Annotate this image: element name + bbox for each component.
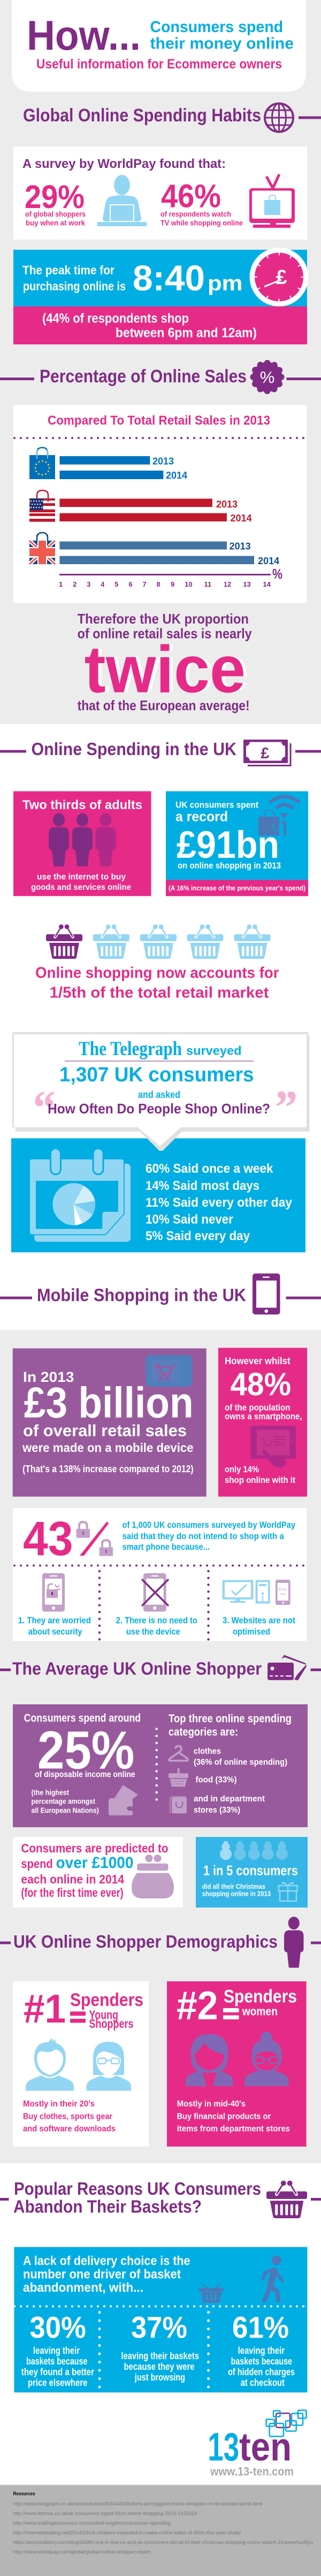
chart axis: 2 — [73, 580, 77, 588]
white background band: UK spending — [0, 724, 321, 1330]
survey result list: 14% Said most days — [146, 1179, 259, 1193]
section heading: Mobile Shopping in the UK — [0, 1273, 321, 1314]
section heading: Online Spending in the UK — [0, 739, 321, 766]
survey result list — [146, 1162, 293, 1243]
heading: number two — [177, 1983, 297, 2028]
chart axis — [59, 566, 282, 588]
icon: globe — [265, 104, 293, 132]
panel: 3 billion mobile sales: £3 billion — [24, 1379, 194, 1427]
Telegraph logo text: The Telegraph — [79, 1038, 182, 1060]
heading: number one: #1 — [24, 1986, 66, 2031]
resources links: http://internetretailing.net/2014/03/uk-retailers-expected-to-make-online-sales-of-45bn-this-year-study/ — [13, 2530, 241, 2535]
logo wordmark: 13 — [208, 2425, 239, 2469]
resources links: http://www.tradingeconomics.com/united-kingdom/consumer-spending — [13, 2520, 171, 2526]
icon: young man — [26, 2038, 74, 2091]
panel: over 1000 predicted spend: (for the first time ever) — [21, 1886, 124, 1900]
panel: 3 billion mobile sales: of overall retail sales — [23, 1421, 187, 1440]
chart axis: 14 — [263, 580, 271, 588]
peak time value: 8:40 — [133, 258, 205, 298]
icon: gift — [279, 1882, 297, 1901]
disposable income stat: all European Nations) — [31, 1806, 99, 1814]
reason 1: security: about security — [28, 1626, 82, 1636]
chart axis: 10 — [185, 580, 193, 588]
panel: smartphone ownership — [218, 1348, 307, 1497]
icon row: five baskets, one highlighted — [46, 925, 271, 959]
stat: 37 percent: just browsing — [134, 2372, 185, 2383]
stat: 43 percent with padlocks — [23, 1512, 113, 1566]
chart axis: 3 — [87, 580, 90, 588]
chart axis: % — [272, 566, 282, 582]
chart axis: 12 — [224, 580, 231, 588]
panel: number two spenders, women — [167, 1981, 306, 2147]
icon: padlock upper — [77, 1522, 90, 1538]
grey background band: top — [0, 0, 321, 724]
top spending categories: categories are: — [169, 1726, 238, 1739]
panel: number one spenders, young shoppers: Buy clothes, sports gear — [23, 2112, 112, 2121]
stat: 61 percent: at checkout — [241, 2378, 285, 2388]
icon: smartphone — [253, 1273, 280, 1314]
survey heading: A survey by WorldPay found that: — [22, 157, 226, 171]
stat: 30 percent — [21, 2311, 94, 2388]
grey background band: mobile and shopper — [0, 1330, 321, 2163]
panel: smartphone ownership: shop online with it — [225, 1475, 295, 1485]
icon: clothes hanger — [169, 1746, 188, 1760]
section heading: The Average UK Online Shopper — [0, 1655, 321, 1680]
bars: USA: 2013 — [216, 499, 238, 510]
panel: 91 billion record spend: £91bn — [177, 824, 279, 866]
chart axis: 6 — [128, 580, 133, 588]
chart axis: 9 — [171, 580, 174, 588]
section heading: reasons for abandoning baskets: Popular Reasons UK Consumers — [14, 2179, 261, 2198]
stat: 29 percent: 29% — [25, 179, 85, 215]
section heading: UK Online Shopper Demographics: UK Online Shopper Demographics — [13, 1932, 278, 1951]
bars: EU: 2014 — [166, 470, 187, 481]
stat: 29 percent: of global shoppers — [25, 210, 86, 218]
panel: number one spenders, young shoppers: and software downloads — [23, 2125, 116, 2134]
panel: peak purchasing time: pm — [208, 272, 243, 295]
panel: number two spenders, women: Buy financial products or — [177, 2112, 271, 2121]
category: clothes: clothes — [194, 1747, 221, 1756]
disposable income stat: Consumers spend around — [24, 1712, 141, 1725]
panel: christmas shopping — [196, 1837, 308, 1908]
panel: reasons not to shop on a smartphone — [13, 1508, 307, 1641]
panel: smartphone ownership: of the population — [225, 1402, 291, 1413]
panel: over 1000 predicted spend: spend — [21, 1857, 53, 1871]
icon: person at laptop — [97, 175, 147, 226]
top spending categories — [169, 1713, 292, 1814]
section heading: Online Spending in the UK: Online Spending in the UK — [31, 739, 236, 759]
icon: US flag bag — [29, 490, 55, 522]
section heading: reasons for abandoning baskets: Abandon Their Baskets? — [13, 2197, 202, 2216]
stat: 46 percent: TV while shopping online — [160, 218, 243, 227]
panel: basket abandonment reasons: number one driver of basket — [23, 2267, 181, 2282]
increase note: (A 16% increase of the previous year's spend) — [169, 884, 305, 892]
stat: 29 percent: buy when at work — [26, 218, 85, 227]
title: How: How... — [27, 12, 141, 59]
panel: over 1000 predicted spend: Consumers are predicted to — [21, 1841, 169, 1855]
icon: person — [284, 1917, 303, 1968]
stat: 30 percent: price elsewhere — [28, 2378, 87, 2388]
category: department stores: and in department — [194, 1795, 265, 1804]
logo mark: interlocking squares — [266, 2410, 306, 2436]
panel: 3 billion mobile sales — [13, 1348, 207, 1497]
reason 2: no need — [116, 1573, 197, 1636]
statement: UK proportion nearly twice European average — [78, 611, 252, 713]
reason 3: not optimised: optimised — [233, 1626, 270, 1636]
stat: 46 percent: 46% — [161, 178, 221, 214]
disposable income stat: of disposable income online — [35, 1770, 135, 1779]
chart axis: 7 — [142, 580, 147, 588]
panel: number two spenders, women: items from department stores — [177, 2125, 290, 2134]
icon: woman with bob hair — [186, 2034, 233, 2086]
icon: abandoned basket — [199, 2284, 224, 2303]
icon: three people — [49, 813, 116, 866]
stat: 30 percent: baskets because — [26, 2356, 87, 2367]
statement: UK proportion nearly twice European average: Therefore the UK proportion — [78, 611, 249, 627]
title: their money online: their money online — [150, 35, 294, 52]
statement: one fifth of retail market — [35, 965, 279, 1001]
disposable income stat: 25% — [37, 1720, 134, 1780]
panel: bar chart of online share of retail sales — [13, 405, 307, 603]
key word: twice: twice — [85, 633, 246, 707]
opening quote: “ — [30, 1081, 55, 1134]
stat: 37 percent: because they were — [124, 2362, 195, 2372]
consumer count: 1,307 UK consumers — [59, 1064, 254, 1086]
icon: food basket — [169, 1768, 188, 1787]
panel: basket abandonment reasons: abandonment, with... — [23, 2281, 143, 2295]
icon: person walking away — [263, 2256, 282, 2301]
respondents note: (44% of respondents shop — [42, 311, 189, 326]
heading: number one — [24, 1986, 143, 2031]
panel: 3 billion mobile sales: were made on a mobile device — [22, 1441, 194, 1455]
section heading: The Average UK Online Shopper: The Average UK Online Shopper — [12, 1658, 262, 1678]
disposable income stat: percentage amongst — [31, 1797, 95, 1805]
chart heading: Compared To Total Retail Sales in 2013 — [48, 413, 270, 428]
disposable income stat: (the highest — [31, 1788, 69, 1796]
stat: 61 percent: baskets because — [231, 2356, 292, 2367]
disposable income stat — [24, 1712, 141, 1814]
abandonment intro: A lack of delivery choice is the — [23, 2254, 190, 2269]
stat: 30 percent: they found a better — [21, 2367, 94, 2378]
mobile sales text: In 2013 — [23, 1369, 74, 1385]
panel: two thirds of adults — [13, 791, 151, 896]
logo: 13ten: ten — [239, 2425, 292, 2469]
speech bubble: Telegraph survey — [12, 1032, 310, 1151]
panel: peak purchasing time: purchasing online is — [23, 279, 126, 293]
panel: how often people shop results — [11, 1139, 305, 1252]
logo: 13ten — [208, 2410, 306, 2478]
bars: EU: 2013 — [152, 456, 174, 467]
panel: over 1000 predicted spend: over £1000 — [56, 1854, 134, 1872]
survey explanation: said that they do not intend to shop with a — [122, 1531, 284, 1541]
panel: number one spenders, young shoppers — [13, 1981, 149, 2147]
section heading: Global Online Spending Habits — [23, 104, 321, 132]
chart axis: 13 — [243, 580, 251, 588]
chart axis: 11 — [204, 580, 211, 588]
survey question: How Often Do People Shop Online? — [48, 1101, 270, 1117]
survey result list: 10% Said never — [146, 1212, 233, 1227]
panel: peak purchasing time — [13, 248, 308, 344]
panel: smartphone ownership: owns a smartphone, — [225, 1411, 302, 1421]
christmas text: 1 in 5 consumers — [203, 1862, 298, 1878]
subtitle: Useful information for Ecommerce owners — [36, 57, 282, 72]
icon: clock with pound sign: £ — [276, 266, 287, 289]
pie chart — [52, 1183, 95, 1225]
statement: UK proportion nearly twice European average: of online retail sales is nearly — [78, 626, 252, 642]
reason 3: not optimised: 404 — [280, 1593, 285, 1596]
icon: clock with pound sign — [249, 248, 308, 306]
panel: 91 billion record spend: a record — [175, 809, 228, 825]
chart axis: 1 — [59, 580, 63, 588]
stat: 61 percent: leaving their — [238, 2346, 285, 2356]
survey explanation: smart phone because... — [122, 1542, 210, 1552]
icon: percent badge — [253, 362, 282, 392]
section heading: Percentage of Online Sales: Percentage of Online Sales — [40, 366, 247, 387]
stat: 30 percent: 30% — [30, 2311, 86, 2345]
icon: percent badge: % — [260, 368, 274, 387]
icon: hand on tablet — [250, 1426, 296, 1468]
icon: wifi and shopping bags — [258, 797, 300, 835]
panel: two thirds of adults: Two thirds of adults — [22, 798, 142, 812]
resources heading: Resources — [13, 2491, 35, 2496]
section heading: Percentage of Online Sales — [0, 362, 321, 392]
heading: number two: Spenders — [224, 1987, 297, 2007]
icon: credit cards — [268, 1655, 307, 1680]
closing line: that of the European average! — [78, 697, 250, 713]
survey result list: 60% Said once a week — [146, 1162, 273, 1176]
category: food: food (33%) — [196, 1775, 237, 1785]
stat: 37 percent: leaving their baskets — [121, 2351, 199, 2362]
stat: 37 percent: 37% — [131, 2311, 187, 2345]
heading: number two: women — [242, 2005, 278, 2018]
heading: number one: Shoppers — [89, 2017, 134, 2031]
statement: one fifth of retail market: 1/5th of the total retail market — [50, 984, 269, 1001]
stat: 61 percent: of hidden charges — [228, 2367, 295, 2378]
record spend text: UK consumers spent — [175, 800, 258, 810]
panel: 91 billion record spend: on online shopping in 2013 — [178, 860, 281, 871]
section heading: Mobile Shopping in the UK: Mobile Shopping in the UK — [37, 1285, 246, 1305]
heading: number two: #2 — [177, 1983, 218, 2028]
reason 1: security — [18, 1573, 91, 1636]
icon row: five snowmen — [220, 1841, 288, 1860]
panel: WorldPay survey — [13, 147, 307, 240]
panel: 3 billion mobile sales: (That's a 138% increase compared to 2012) — [22, 1464, 194, 1474]
young shoppers text: Mostly in their 20's — [23, 2100, 95, 2109]
resources links: http://www.worldpay.com/global/global-online-shopper-report — [13, 2549, 151, 2555]
resources links: http://www.telegraph.co.uk/news/uknews/9054400/Britons-are-biggest-online-shoppers-in-developed-world.html — [13, 2501, 262, 2506]
survey result list: 11% Said every other day — [146, 1195, 293, 1210]
icon: television with shopping bag — [249, 174, 295, 228]
panel: basket abandonment reasons — [14, 2247, 307, 2393]
survey explanation: of 1,000 UK consumers surveyed by WorldPay — [122, 1520, 295, 1530]
word shadow: twice — [88, 633, 249, 707]
statement: one fifth of retail market: Online shopping now accounts for — [35, 965, 279, 982]
stat: 46 percent: of respondents watch — [160, 210, 231, 218]
icon: older woman with glasses — [244, 2032, 289, 2086]
peak time label: The peak time for — [22, 263, 114, 277]
stat: 37 percent — [121, 2311, 199, 2383]
top spending categories: stores (33%) — [194, 1805, 240, 1814]
icon: banknotes — [243, 740, 291, 766]
only 14 percent text: only 14% — [225, 1464, 259, 1474]
reason 3: not optimised: 3. Websites are not — [223, 1616, 295, 1626]
bars: USA — [59, 498, 252, 524]
panel: two thirds of adults: goods and services online — [31, 883, 131, 892]
ownership text: However whilst — [225, 1356, 291, 1366]
heading: number one: Spenders — [70, 1990, 143, 2010]
title panel — [12, 0, 306, 92]
bars: UK — [59, 541, 279, 566]
and asked: and asked — [138, 1089, 180, 1100]
icon: young woman with glasses — [87, 2042, 131, 2091]
icon: basket — [266, 2181, 307, 2218]
icon: UK flag bag — [29, 533, 55, 564]
top spending categories: Top three online spending — [169, 1713, 292, 1725]
section heading: reasons for abandoning baskets — [0, 2179, 321, 2218]
top spending categories: (36% of online spending) — [194, 1758, 287, 1767]
white background band: abandon baskets — [0, 2163, 321, 2485]
icon: tablet with cart — [146, 1355, 192, 1387]
stat: 43 percent with padlocks: 43 — [23, 1512, 73, 1566]
chart axis: 4 — [101, 580, 105, 588]
panel: peak purchasing time: between 6pm and 12am) — [116, 326, 257, 341]
survey result list: 5% Said every day — [146, 1229, 250, 1243]
reason 3: not optimised: Error — [279, 1588, 287, 1591]
panel: smartphone ownership: 48% — [230, 1366, 291, 1402]
women text: Mostly in mid-40's — [177, 2100, 246, 2109]
panel: 91 billion record spend — [166, 791, 308, 896]
panel: christmas shopping: shopping online in 2013 — [202, 1889, 271, 1897]
heading: number one: Young — [89, 2008, 118, 2022]
chart axis: 8 — [156, 580, 160, 588]
panel: christmas shopping: did all their Christmas — [202, 1882, 265, 1890]
stat: 30 percent: leaving their — [33, 2346, 80, 2356]
icon: EU flag bag — [29, 448, 55, 479]
reason 1: security: 1. They are worried — [18, 1616, 91, 1626]
reason 2: no need: use the device — [126, 1626, 180, 1636]
icon: coin purse — [132, 1855, 174, 1898]
section heading: UK Online Shopper Demographics — [0, 1917, 321, 1968]
section heading: Global Online Spending Habits: Global Online Spending Habits — [23, 105, 261, 126]
reason 3: not optimised — [223, 1580, 295, 1636]
resources footer — [0, 2485, 321, 2576]
icon: department store bag — [170, 1797, 187, 1813]
closing quote: ” — [272, 1081, 296, 1134]
stat: 61 percent: 61% — [232, 2311, 289, 2345]
panel: over 1000 predicted spend — [13, 1837, 183, 1908]
stat: 61 percent — [228, 2311, 295, 2388]
resources links — [13, 2501, 314, 2555]
reason 2: no need: 2. There is no need to — [116, 1616, 197, 1626]
stat: 46 percent — [160, 178, 243, 227]
bars: UK: 2014 — [258, 556, 279, 566]
icon: banknotes: £ — [261, 745, 270, 762]
icon: calendar with pie chart — [30, 1149, 131, 1242]
survey explanation — [122, 1520, 295, 1552]
panel: over 1000 predicted spend: each online in 2014 — [21, 1872, 124, 1886]
resources links: http://www.ibtimes.co.uk/uk-consumers-spent-91bn-online-shopping-2013-1432424 — [13, 2511, 197, 2516]
resources links: https://econsultancy.com/blog/64280-one-in-five-us-and-uk-consumers-did-all-of-their-christmas-shopping-online-stats#i.1ihaswvhuxf5yu — [13, 2540, 314, 2545]
website: www.13-ten.com — [210, 2465, 294, 2478]
surveyed: surveyed — [186, 1044, 242, 1058]
bars: UK: 2013 — [230, 541, 251, 552]
chart axis: 5 — [114, 580, 118, 588]
caption: use the internet to buy — [37, 873, 126, 882]
bars: EU — [59, 456, 187, 481]
bars: USA: 2014 — [230, 513, 251, 524]
icon: wallet — [109, 1785, 138, 1816]
icon: padlock lower — [100, 1540, 113, 1556]
title: consumers spend: Consumers spend — [150, 18, 283, 36]
panel: consumer spending share — [13, 1704, 308, 1827]
